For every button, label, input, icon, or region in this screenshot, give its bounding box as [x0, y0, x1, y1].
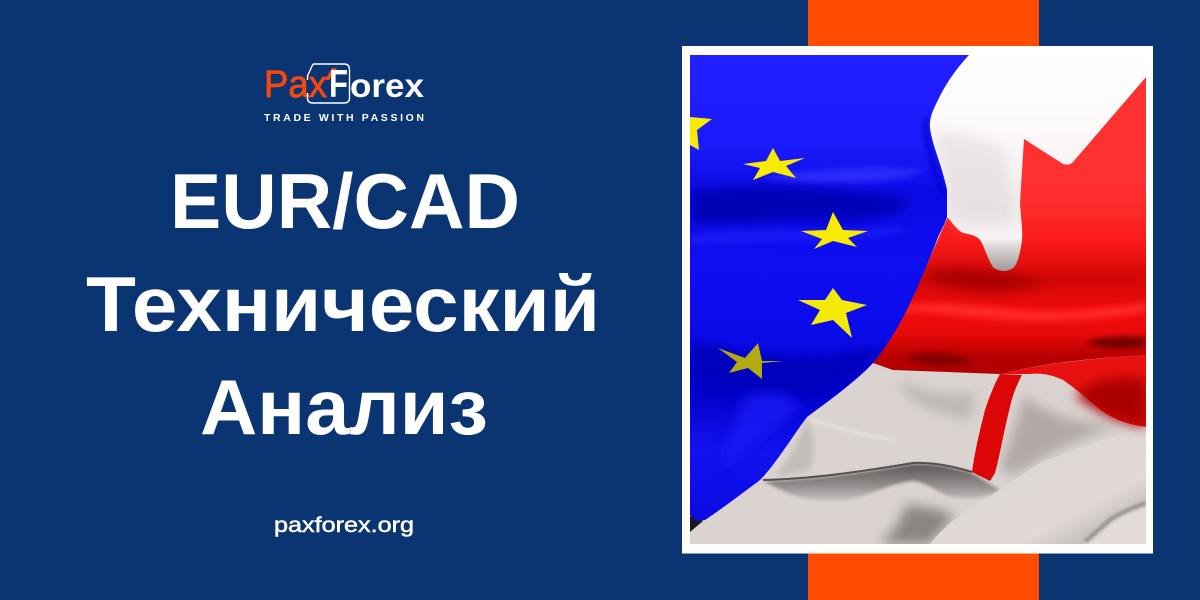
- title line 3: Анализ: [200, 363, 488, 451]
- crease shadow: [763, 464, 1000, 501]
- bottom-left corner dark: [690, 516, 703, 532]
- title: [86, 157, 600, 451]
- foreground fold lower corner: [1083, 520, 1112, 544]
- logo tagline: TRADE WITH PASSION: [264, 112, 424, 124]
- white field of Canadian flag: [925, 55, 1146, 271]
- red lower band: [1000, 355, 1146, 427]
- grey cloth of Canadian flag: [690, 355, 1146, 544]
- star 3: [801, 212, 868, 249]
- cloth mid shading: [900, 380, 975, 420]
- title line 1: EUR/CAD: [170, 157, 520, 245]
- cloth fold shade: [775, 420, 813, 476]
- bottom dark fold: [880, 505, 955, 544]
- logo wordmark: orex: orex: [350, 67, 425, 104]
- star 2: [743, 148, 805, 180]
- blue dark edge: [926, 118, 943, 195]
- blue dark fold: [690, 186, 908, 223]
- logo wordmark: Pax: Pax: [264, 64, 327, 106]
- star 1: [690, 117, 712, 150]
- cloth fold highlight: [810, 420, 895, 440]
- website url: paxforex.org: [274, 514, 414, 537]
- right cloth shade: [1000, 395, 1120, 475]
- white field soft shade: [936, 130, 1012, 225]
- foreground fold: [930, 428, 1146, 544]
- orange vertical band: [808, 0, 1039, 600]
- star 4: [798, 288, 867, 338]
- red field of Canadian flag: [873, 55, 1146, 374]
- blue light fold middle: [692, 228, 899, 242]
- red far right dark spot: [1085, 337, 1146, 349]
- flag image: EU and Canada: [690, 55, 1146, 544]
- blue dark fold lower: [690, 340, 885, 396]
- blue field of EU flag: [690, 55, 969, 521]
- red lower dark spots: [905, 353, 975, 365]
- logo badge: F: [308, 63, 350, 106]
- white photo frame: [682, 46, 1153, 554]
- red lower band shadow: [1075, 378, 1146, 427]
- blue light fold upper: [760, 168, 925, 183]
- logo: PaxForex: [264, 63, 425, 124]
- red band highlight: [900, 302, 1146, 321]
- title line 2: Технический: [86, 260, 600, 348]
- logo badge: F: F: [329, 63, 348, 106]
- EU stars: [690, 117, 868, 379]
- star 5: [718, 343, 784, 379]
- shadow under fold: [1085, 503, 1146, 542]
- crease top edge: [763, 463, 972, 480]
- red upper dark fold: [920, 269, 1050, 291]
- blue light fold lower: [732, 388, 800, 446]
- red vertical stripe: [972, 374, 1022, 481]
